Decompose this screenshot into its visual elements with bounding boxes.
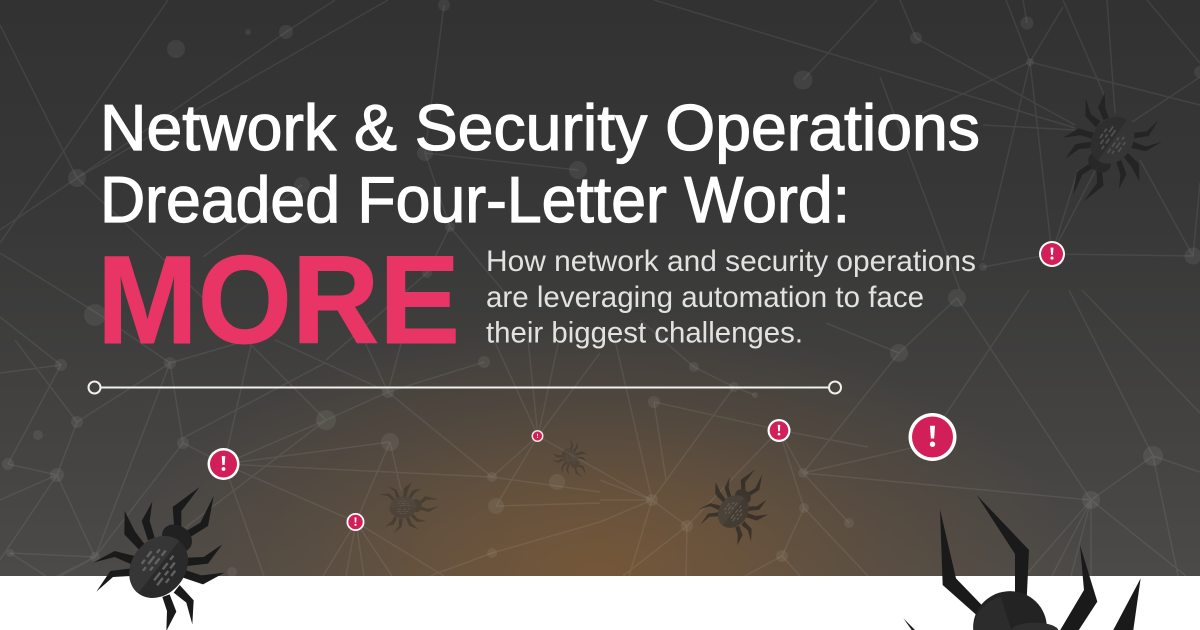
icon: large bug bottom right — [903, 495, 1141, 630]
title: Dreaded Four-Letter Word: — [100, 164, 850, 236]
title — [100, 92, 980, 236]
icon: alert badge centre — [768, 419, 790, 442]
heading: MORE: MORE — [97, 231, 460, 370]
icon: faint bug centre — [547, 435, 596, 481]
icon: bug top right — [1061, 91, 1164, 202]
icon: bug bottom left — [93, 487, 225, 630]
white bottom band — [0, 576, 1200, 630]
icon: small bug centre right — [699, 470, 768, 545]
icon: faint bug centre left — [366, 466, 445, 545]
icon: alert badge tiny — [532, 430, 544, 442]
subtitle: How network and security operations — [486, 245, 976, 278]
icon: alert badge left — [208, 448, 240, 480]
icon: alert badge right — [1039, 241, 1065, 267]
subtitle: their biggest challenges. — [486, 316, 803, 350]
subtitle: are leveraging automation to face — [486, 281, 924, 314]
divider line with end circles — [88, 382, 841, 394]
icon: alert badge large — [908, 413, 956, 461]
title: Network & Security Operations — [100, 92, 980, 164]
subtitle — [486, 245, 976, 350]
icon: alert badge lower left — [346, 513, 364, 531]
